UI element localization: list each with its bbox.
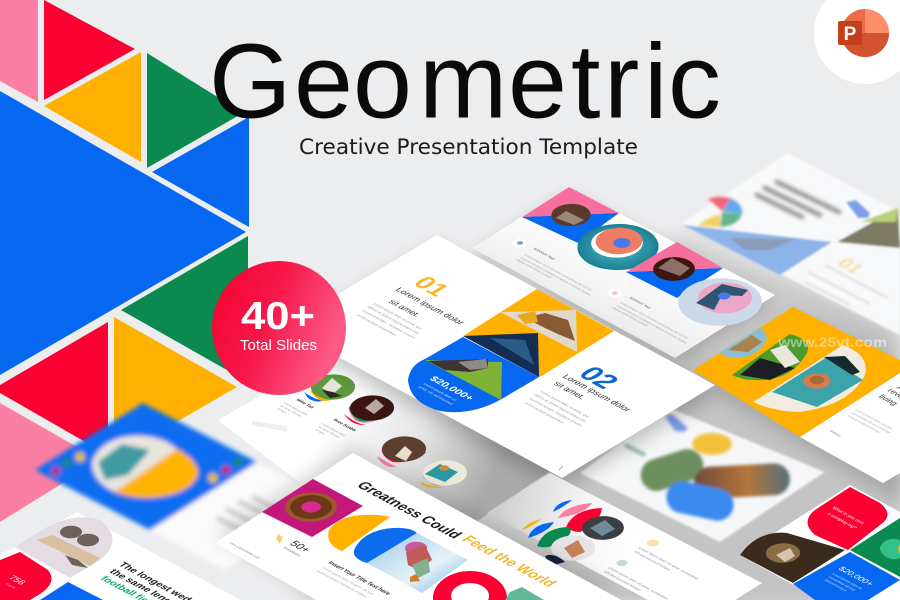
slide surface xyxy=(283,235,715,478)
title: Geometric xyxy=(209,22,721,140)
red rounded tile xyxy=(808,487,888,550)
person 1 text: sit amet, Do non xyxy=(279,404,303,418)
yellow icon xyxy=(644,538,662,548)
shadow xyxy=(472,195,775,366)
small landscape half-circle xyxy=(720,328,767,358)
P tile xyxy=(838,21,862,45)
navy half circle xyxy=(545,555,565,566)
green helmet photo xyxy=(425,359,502,400)
text block 1: elit sed eiusmod tempor xyxy=(633,550,673,572)
panel: geometric triangles xyxy=(0,0,249,522)
lower quadrant xyxy=(841,33,889,57)
number 02: 02 xyxy=(572,362,626,393)
beige photo circle xyxy=(542,530,604,566)
dark photo circle xyxy=(573,511,633,545)
right dots xyxy=(208,458,242,483)
icon and text 1: aliqua enim minim veniam xyxy=(515,258,553,279)
person 2 text: tempor xyxy=(314,428,327,436)
photo half circle xyxy=(92,436,177,492)
upper quadrant xyxy=(865,9,889,33)
red tile xyxy=(0,552,52,600)
green corner xyxy=(860,208,898,222)
badge circle xyxy=(212,261,346,395)
green triangle top xyxy=(147,53,243,168)
blurred heading xyxy=(757,182,839,217)
paragraph 01: eiusmod tempor, incididunt ut enim xyxy=(361,309,416,339)
paragraph 01 xyxy=(355,302,423,339)
slide text: Website xyxy=(828,429,842,437)
red tile text xyxy=(826,506,866,530)
red triangle lower xyxy=(0,322,108,455)
slide surface xyxy=(580,407,825,542)
icon and text 2: Lorem ipsum dolor sit amet consectetur elit sed do xyxy=(619,301,689,339)
white disc xyxy=(814,0,900,84)
dark donut photo xyxy=(740,533,845,583)
stat icon xyxy=(276,534,283,544)
photo top right xyxy=(837,208,900,248)
panel: slide with people circles xyxy=(218,330,580,560)
badge label: Total Slides xyxy=(240,337,317,354)
yellow half circle xyxy=(328,515,390,551)
person 2 text: Lorem ipsum dolor xyxy=(320,422,348,437)
blue tile text xyxy=(823,572,863,592)
panel: circles slide xyxy=(487,473,762,600)
yellow block xyxy=(693,307,900,437)
blue triangle xyxy=(683,225,832,275)
person 2 text: sit amet, Do non xyxy=(317,425,341,439)
shadow xyxy=(283,245,715,488)
shadow zone behind the slides xyxy=(300,230,900,600)
paragraph 02: eiusmod tempor, incididunt ut enim xyxy=(528,397,583,427)
person 3 photo xyxy=(373,431,435,467)
yellow number: 01 xyxy=(832,256,869,277)
icon and text 2 xyxy=(605,287,689,344)
P letter: P xyxy=(844,24,857,45)
green triangle lower xyxy=(121,236,248,382)
photo arch xyxy=(15,517,112,578)
heading 01: sit amet. xyxy=(386,298,423,318)
slide surface xyxy=(682,153,900,335)
paragraph: eiusmod tempor incididunt ut labore xyxy=(315,569,369,598)
stat 50+: 50+ xyxy=(286,539,313,554)
red ring xyxy=(433,571,507,600)
red triangle top xyxy=(44,0,135,100)
panel: main slide xyxy=(283,235,715,488)
blue tag xyxy=(665,414,688,432)
red tile text: a creeping tag? xyxy=(826,512,859,530)
icon and text 2: eiusmod tempor incididunt ut labore et dolore magna xyxy=(615,304,688,344)
badge: 40+ total slides xyxy=(212,261,346,395)
photo on triangle xyxy=(730,238,795,250)
paragraph 01: minim veniam consectetur xyxy=(355,313,398,337)
horse photo triangle xyxy=(500,310,577,352)
panel: blurred centre slide xyxy=(580,407,825,542)
pink triangle 1 xyxy=(522,187,619,217)
person 4 photo xyxy=(414,455,476,491)
badge number: 40+ xyxy=(241,295,315,338)
blue tile text: Lorem ipsum dolor sit xyxy=(831,572,863,590)
slide text: living xyxy=(876,393,900,407)
photo pill green xyxy=(637,445,707,495)
photo pill brown xyxy=(693,463,791,499)
panel: Greatness slide xyxy=(215,445,625,600)
title highlight: Feed the World xyxy=(458,533,560,589)
paragraph 02 xyxy=(523,390,590,427)
blue caption: Lorem ipsum dolor sit xyxy=(422,382,458,402)
blue arch xyxy=(354,528,417,563)
robot photo xyxy=(367,533,468,593)
paragraph 01: labore et dolore magna aliqua sed xyxy=(366,305,420,335)
slide surface xyxy=(215,453,625,600)
icon and text 1: Lorem ipsum dolor sit amet consectetur elit sed do xyxy=(523,253,593,291)
slide text: Lorem ipsum dolor sit amet xyxy=(854,408,894,430)
paragraph 02: Lorem ipsum dolor sit amet, Qui xyxy=(539,390,590,418)
white text area xyxy=(800,373,900,483)
left dots xyxy=(52,452,85,476)
icon and text 1 xyxy=(510,237,593,296)
darker shadow band lower right xyxy=(560,345,900,600)
blue triangle 1 xyxy=(522,213,619,243)
panel: slide with image row xyxy=(472,187,779,366)
dark photo circle 1 xyxy=(543,199,599,231)
heading 01: Lorem ipsum dolor xyxy=(393,286,467,326)
watermark: www.25yt.com xyxy=(777,335,887,350)
blue triangle right xyxy=(152,117,249,227)
blurred lines xyxy=(805,265,888,305)
title text: Greatness Could xyxy=(353,479,466,541)
orange circle xyxy=(841,9,889,57)
slide surface xyxy=(0,512,250,600)
yellow circle xyxy=(692,433,732,455)
blue block xyxy=(35,403,257,530)
red tile text: What to you cost xyxy=(831,506,866,525)
red tile value: 756 xyxy=(6,574,28,586)
icon and text 2: 5000000 Year xyxy=(628,296,653,310)
half-circle stack xyxy=(522,500,602,547)
website text: www.yourwebsite.com xyxy=(228,541,261,559)
person 1 photo xyxy=(302,369,364,405)
paragraph 02: minim veniam consectetur xyxy=(523,401,566,425)
blue tile xyxy=(793,552,900,600)
shadow xyxy=(693,317,900,500)
magenta donut square xyxy=(262,479,363,537)
text block 2: Lorem ipsum dolor sit amet, consectetur xyxy=(607,566,671,600)
person 1 name: Mike Tail xyxy=(295,398,315,409)
text block 1: Lorem ipsum dolor sit amet, consectetur xyxy=(637,546,701,581)
pale blue photo circle xyxy=(661,268,779,336)
paragraph: Lorem ipsum dolor sit amet, elit sed xyxy=(321,566,374,595)
slide text: tempor incididunt labore xyxy=(846,414,881,434)
panel: bottom-left slide xyxy=(0,512,250,600)
yellow diamond xyxy=(463,289,614,377)
icon: PowerPoint logo xyxy=(814,0,900,84)
person 2 photo xyxy=(341,390,403,426)
blue triangle 2 xyxy=(626,268,723,298)
left arrow mark xyxy=(252,423,287,429)
yellow triangle lower xyxy=(114,317,237,458)
dark navy photo triangle xyxy=(463,333,539,377)
person 2 name: Bree Scabb xyxy=(332,418,358,432)
blue tile text: eiusmod tempor xyxy=(823,578,849,592)
slide surface xyxy=(472,187,775,358)
green half-circle photo xyxy=(732,334,808,380)
person 1 text: Lorem ipsum dolor xyxy=(282,401,310,416)
icon and text 1: eiusmod tempor incididunt ut labore et dolore magna xyxy=(519,256,592,296)
pink triangle top xyxy=(0,0,38,102)
photo subject xyxy=(98,444,150,480)
green tile rings xyxy=(880,539,900,559)
paragraph 02: labore et dolore magna aliqua sed xyxy=(533,393,587,423)
green icon xyxy=(614,559,630,567)
white slide section xyxy=(150,462,330,570)
teal donut circle xyxy=(561,214,675,280)
green tile xyxy=(850,518,900,577)
pink triangle 2 xyxy=(626,242,723,272)
slide surface xyxy=(218,330,580,560)
teal tile xyxy=(505,587,544,600)
shadow xyxy=(215,445,620,600)
large blue triangle xyxy=(0,91,246,375)
blue tile text: consectetur elit sed xyxy=(827,575,856,591)
yellow triangle top xyxy=(44,52,141,162)
green label xyxy=(625,445,645,455)
blue value text: $20,000+ xyxy=(426,375,477,403)
panel: yellow photo slide xyxy=(693,307,900,500)
subtitle: Creative Presentation Template xyxy=(299,135,638,159)
slide surface xyxy=(487,473,762,600)
stat label: Donations xyxy=(282,546,302,557)
paragraph 01: Lorem ipsum dolor sit amet, Qui xyxy=(372,302,423,330)
page mark xyxy=(559,466,563,470)
blue tile value: $20,000+ xyxy=(836,565,876,587)
slide text: consectetur elit sed eiusmod xyxy=(850,411,891,434)
insert title: Insert Your Title Text here xyxy=(326,560,393,596)
slide text xyxy=(828,384,900,437)
slide surface xyxy=(740,485,900,600)
panel: faded top-right slide xyxy=(682,153,900,335)
dark photo circle 2 xyxy=(644,252,704,286)
blue pill xyxy=(663,478,737,524)
beige half-circle photo xyxy=(753,345,866,412)
heading 02: Lorem ipsum dolor xyxy=(560,373,634,413)
icon and text 1: 5000000 Year xyxy=(532,247,557,261)
panel: blurred blue slide xyxy=(35,403,330,570)
pie mark xyxy=(698,197,742,227)
blue tile xyxy=(40,582,103,600)
slide content xyxy=(625,414,791,524)
blurred bars xyxy=(217,497,278,532)
yellow half circle xyxy=(115,449,198,498)
blue rounded shape xyxy=(408,337,539,412)
heading 02: sit amet. xyxy=(551,380,588,400)
person 1 text: tempor xyxy=(276,407,289,415)
blue caption: amet, elit sed eiusmod xyxy=(417,385,454,406)
blue button xyxy=(846,200,870,218)
icon and text 2: aliqua enim minim veniam xyxy=(611,306,649,327)
number 01: 01 xyxy=(407,273,455,300)
pink triangle lower xyxy=(0,403,100,522)
panel: bottom-right slide xyxy=(740,485,900,600)
text block 2: elit sed eiusmod tempor xyxy=(603,570,643,592)
red tile label: Cases xyxy=(4,582,17,589)
